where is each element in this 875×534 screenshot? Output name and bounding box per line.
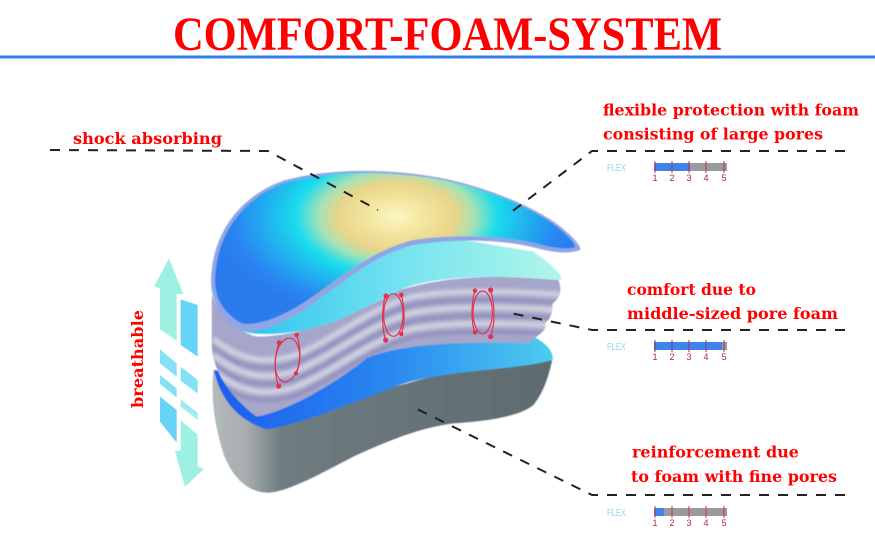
flex scale: top layer — [607, 161, 727, 183]
label: reinforcement — [631, 442, 837, 486]
label: flexible protection — [603, 100, 859, 144]
icon: air circulation right — [472, 288, 494, 339]
label: flexible protection: consisting of large pores — [603, 124, 823, 144]
leader line: comfort — [510, 313, 845, 330]
cyan surface of middle layer — [237, 235, 562, 334]
middle layer: stacked comfort foam — [211, 276, 561, 418]
icon: air circulation left — [272, 333, 302, 388]
icon: breathable arrows — [154, 258, 204, 487]
flex scale: middle layer — [607, 340, 727, 362]
flex scale: top layer: 5 — [721, 173, 727, 183]
leader line: shock absorbing — [50, 150, 378, 210]
flex scale: bottom layer: 1 — [652, 518, 658, 528]
label: shock absorbing: shock absorbing — [73, 129, 222, 148]
title: COMFORT-FOAM-SYSTEM — [173, 8, 722, 61]
flex scale: bottom layer: 2 — [669, 518, 675, 528]
bottom layer: grey reinforcement foam — [213, 357, 553, 493]
flex scale: top layer: 3 — [686, 173, 692, 183]
flex scale: top layer: 4 — [703, 173, 709, 183]
leader line: flexible protection — [510, 151, 845, 213]
foam layers diagram — [200, 171, 580, 493]
label: flexible protection: flexible protection with foam — [603, 100, 859, 120]
label: reinforcement: reinforcement due — [632, 442, 799, 462]
label: comfort: middle-sized pore foam — [627, 304, 838, 323]
top layer: lavender edge — [211, 171, 580, 331]
flex scale: bottom layer: 4 — [703, 518, 709, 528]
label: breathable: breathable — [128, 310, 147, 408]
flex scale: bottom layer — [607, 506, 727, 528]
top layer: shock absorbing surface — [215, 173, 575, 324]
label: comfort — [627, 280, 838, 323]
flex scale: middle layer: 4 — [703, 352, 709, 362]
flex scale: middle layer: 5 — [721, 352, 727, 362]
leader line: reinforcement — [415, 408, 845, 495]
flex scale: top layer: FLEX — [607, 163, 626, 174]
flex scale: top layer: 2 — [669, 173, 675, 183]
label: reinforcement: to foam with fine pores — [631, 467, 837, 486]
flex scale: bottom layer: 3 — [686, 518, 692, 528]
flex scale: bottom layer: 5 — [721, 518, 727, 528]
label: comfort: comfort due to — [627, 280, 756, 299]
flex scale: top layer: 1 — [652, 173, 658, 183]
flex scale: middle layer: 3 — [686, 352, 692, 362]
flex scale: bottom layer: FLEX — [607, 508, 626, 519]
flex scale: middle layer: 2 — [669, 352, 675, 362]
icon: air circulation centre — [383, 293, 404, 342]
blue surface of bottom layer — [214, 337, 553, 429]
flex scale: middle layer: FLEX — [607, 342, 626, 353]
flex scale: middle layer: 1 — [652, 352, 658, 362]
